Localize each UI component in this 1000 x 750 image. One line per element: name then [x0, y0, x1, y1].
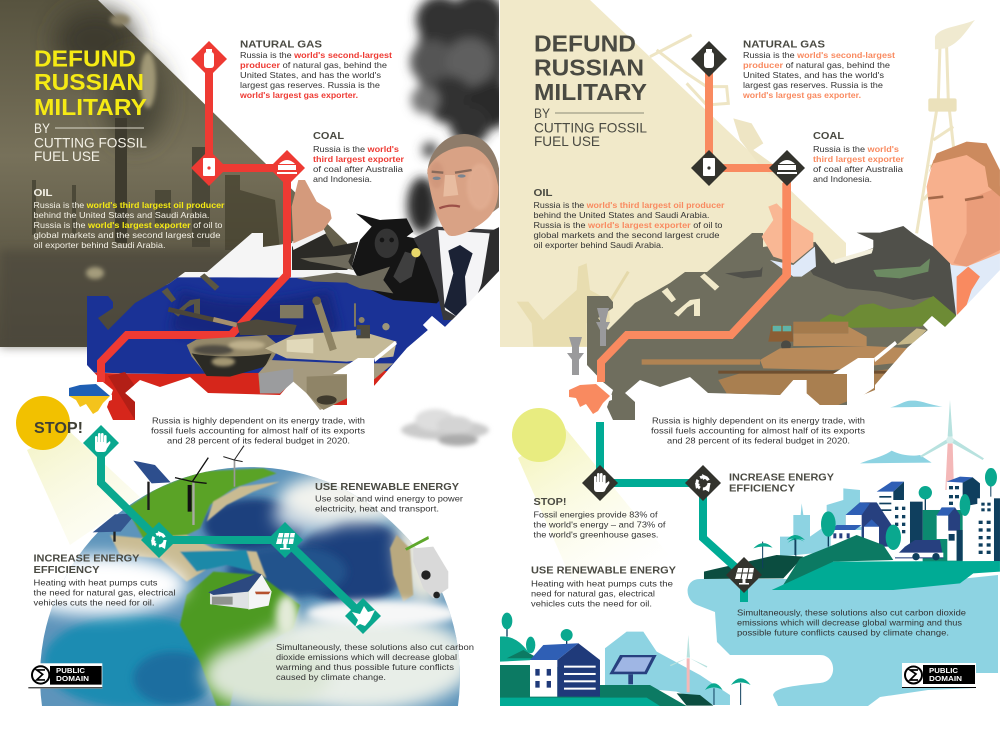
text: coal [813, 130, 905, 184]
Russian flag map [87, 233, 452, 420]
text: simultaneously [737, 608, 966, 638]
text: increase energy efficiency: INCREASE ENERGY [34, 553, 140, 565]
icon: gas cylinder node [691, 41, 727, 77]
text: oil: OIL [34, 187, 53, 199]
palm trees [714, 683, 741, 705]
text: coal [313, 130, 405, 184]
text: coal: third largest exporter [813, 154, 905, 164]
icon: stop hand node [83, 425, 119, 457]
text: energy trade: Russia is highly dependent on its energy trade, with [152, 416, 365, 426]
text: natural gas: producer of natural gas, behind the [240, 60, 387, 70]
text: oil: oil exporter behind Saudi Arabia. [534, 240, 664, 250]
text: oil: Russia is the world's third largest oil producer [34, 200, 225, 210]
text: coal: of coal after Australia [813, 164, 903, 174]
panel: left photographic version [0, 0, 514, 712]
text: oil: global markets and the second largest crude [34, 230, 221, 240]
teal solution pathway [97, 457, 357, 610]
text: use renewable energy: electricity, heat and transport. [315, 504, 439, 514]
text: natural gas: United States, and has the world's [240, 70, 381, 80]
battle tanks [168, 296, 397, 410]
panel: right illustrated version [500, 0, 1000, 706]
text: stop: Fossil energies provide 83% of [534, 510, 658, 520]
icon: gas cylinder node [191, 41, 227, 73]
public domain label: PUBLIC [56, 668, 85, 675]
Putin, pointing arm and skeleton figure [292, 134, 500, 320]
factory smoke and chimneys [0, 8, 280, 347]
text: increase energy efficiency: vehicles cuts the need for oil. [34, 598, 154, 608]
text: increase energy efficiency: INCREASE ENERGY [729, 471, 834, 483]
text: use renewable energy: Heating with heat pumps cuts the [531, 579, 673, 589]
text: simultaneously: Simultaneously, these solutions also cut carbon dioxide [737, 608, 966, 618]
wind turbine [945, 443, 954, 490]
sun and beam [512, 408, 677, 592]
text: coal: Russia is the world's [313, 144, 399, 154]
solar panels [133, 461, 171, 483]
electric car [405, 536, 429, 551]
title: RUSSIAN [34, 69, 144, 95]
text: coal: COAL [313, 130, 345, 142]
title: DEFUND [534, 31, 636, 57]
text: simultaneously: Simultaneously, these solutions also cut carbon [276, 642, 474, 652]
text: natural gas: NATURAL GAS [743, 38, 825, 50]
icon: recycle node [685, 465, 721, 501]
icon: coal cart node [273, 150, 305, 182]
palm [794, 540, 797, 558]
text: use renewable energy: vehicles cuts the need for oil. [531, 599, 652, 609]
icon: stop hand node [582, 465, 618, 501]
icon: solar panel node [267, 522, 303, 558]
trees [828, 523, 829, 547]
missiles [567, 308, 610, 375]
text: natural gas: largest gas reserves. Russia is the [240, 80, 380, 90]
houses [846, 502, 892, 547]
white cut-outs of the right map [833, 270, 1000, 430]
background buildings [780, 488, 880, 557]
public domain badge: PUBLIC [929, 668, 958, 675]
text: natural gas: producer of natural gas, behind the [743, 60, 890, 70]
tie [444, 245, 473, 317]
cream background [500, 0, 846, 347]
text: increase energy efficiency [729, 471, 834, 495]
small turbine [687, 658, 690, 692]
white cut-outs of the map [333, 271, 499, 405]
text: natural gas: NATURAL GAS [240, 38, 322, 50]
text: coal: COAL [813, 130, 845, 142]
text: coal: and Indonesia. [813, 174, 872, 184]
trees [506, 622, 508, 637]
smoke cloud [407, 0, 514, 233]
hills [500, 665, 687, 706]
text: increase energy efficiency: EFFICIENCY [729, 483, 795, 495]
title: FUEL USE [34, 148, 100, 164]
text: stop: STOP! [534, 496, 566, 508]
title: CUTTING FOSSIL [534, 120, 647, 136]
text: coal: and Indonesia. [313, 174, 372, 184]
text: oil: Russia is the world's third largest oil producer [534, 200, 725, 210]
text: natural gas [742, 38, 895, 100]
icon: oil barrel node [191, 154, 223, 186]
buildings [923, 510, 963, 567]
text: oil [34, 187, 225, 250]
text: natural gas: world's largest gas exporter. [742, 90, 861, 100]
cream inlets [662, 273, 719, 317]
title: BY [34, 120, 51, 136]
text: energy trade: fossil fuels accounting for almost half of its exports [651, 426, 865, 436]
text: coal: Russia is the world's [813, 144, 899, 154]
text: oil: behind the United States and Saudi Arabia. [34, 210, 210, 220]
wind turbines [192, 482, 195, 525]
title [534, 31, 647, 149]
jet fighters [297, 254, 393, 293]
title: MILITARY [534, 79, 647, 105]
text: simultaneously [275, 642, 474, 682]
title: MILITARY [34, 94, 147, 120]
north america [110, 468, 413, 706]
text: energy trade: and 28 percent of its federal budget in 2020. [667, 436, 850, 446]
text: stop: the world's greenhouse gases. [534, 530, 658, 540]
clouds [7, 555, 187, 615]
text: natural gas [239, 38, 392, 100]
orange pipeline [601, 59, 787, 382]
Russia map silhouette [580, 225, 970, 425]
public domain badge [902, 663, 976, 688]
text: coal: third largest exporter [313, 154, 405, 164]
text: increase energy efficiency: EFFICIENCY [34, 564, 100, 576]
text: simultaneously: emissions which will decrease global warming and thus [737, 618, 962, 628]
text: oil [534, 187, 725, 250]
text: oil: global markets and the second largest crude [534, 230, 720, 240]
solar panel [609, 655, 657, 674]
icon: recycle node [141, 522, 173, 558]
icon: solar panel node [726, 557, 762, 593]
icon: dove node [345, 598, 381, 634]
refinery and oil rig decoration [517, 20, 975, 347]
text: increase energy efficiency: the need for natural gas, electrical [34, 588, 176, 598]
text: natural gas: Russia is the world's second-largest [743, 50, 895, 60]
red pipeline [101, 59, 287, 382]
head: hair [427, 134, 500, 217]
earth globe [7, 446, 473, 712]
inlets of the map [162, 273, 219, 317]
icon: coal cart node [769, 150, 805, 186]
lake [600, 575, 998, 706]
Ukraine flag map [69, 384, 112, 414]
brown tank and rocket truck [642, 322, 927, 405]
public domain badge [28, 663, 102, 689]
text: oil: Russia is the world's largest exporter of oil to [534, 220, 723, 230]
grey cloud [401, 409, 489, 446]
text: use renewable energy: USE RENEWABLE ENERGY [315, 481, 459, 493]
text: simultaneously: warming and thus possible future conflicts [275, 662, 454, 672]
text: oil: oil exporter behind Saudi Arabia. [34, 240, 166, 250]
text: oil: OIL [534, 187, 553, 199]
text: oil: Russia is the world's largest exporter of oil to [34, 220, 223, 230]
Ukraine map [567, 383, 612, 416]
head: face [427, 146, 498, 236]
skeleton figure [352, 213, 443, 303]
light blue buildings [605, 632, 730, 705]
house [210, 592, 248, 609]
title: DEFUND [34, 46, 136, 72]
shirt [438, 230, 490, 317]
text: use renewable energy: Use solar and wind energy to power [315, 494, 463, 504]
icon: oil barrel node [691, 150, 727, 186]
sun with STOP [16, 396, 140, 545]
public domain badge: DOMAIN [929, 676, 962, 683]
text: use renewable energy [531, 565, 676, 609]
village with house, solar panel and turbine [500, 613, 751, 706]
green shoreline [704, 535, 1000, 590]
text: simultaneously: possible future conflicts caused by climate change. [737, 628, 949, 638]
text: oil: behind the United States and Saudi Arabia. [534, 210, 710, 220]
text: natural gas: United States, and has the world's [743, 70, 884, 80]
text: stop: the world's energy – and 73% of [534, 520, 666, 530]
public domain label line two: DOMAIN [56, 676, 89, 683]
dark jacket arm [292, 230, 358, 270]
title: CUTTING FOSSIL [34, 135, 147, 151]
olive factory background [0, 0, 347, 347]
text: energy trade: fossil fuels accounting for almost half of its exports [151, 426, 365, 436]
house [530, 660, 557, 697]
hillside, helicopter and bushes [725, 226, 957, 328]
text: energy trade: Russia is highly dependent on its energy trade, with [652, 416, 865, 426]
suit [413, 227, 500, 320]
text: energy trade [151, 416, 365, 446]
title: BY [534, 105, 551, 121]
title: FUEL USE [534, 133, 600, 149]
text: natural gas: largest gas reserves. Russia is the [743, 80, 883, 90]
text: energy trade: and 28 percent of its federal budget in 2020. [167, 436, 350, 446]
text: use renewable energy: USE RENEWABLE ENERGY [531, 565, 676, 577]
text: increase energy efficiency [34, 553, 176, 608]
text: energy trade [651, 416, 865, 446]
illustrated Putin [927, 142, 1000, 320]
title [34, 46, 147, 164]
text: coal: of coal after Australia [313, 164, 403, 174]
electric car and charger [895, 540, 943, 558]
text: simultaneously: caused by climate change. [276, 672, 386, 682]
stop label: STOP! [34, 420, 83, 437]
title: RUSSIAN [534, 54, 644, 80]
south america [180, 572, 300, 706]
text: natural gas: Russia is the world's second-largest [240, 50, 392, 60]
text: stop [534, 496, 666, 540]
text: use renewable energy [315, 481, 463, 514]
clouds [860, 401, 943, 463]
text: use renewable energy: need for natural gas, electrical [531, 589, 655, 599]
teal solution pathway [600, 422, 744, 602]
pointing hand [292, 180, 332, 243]
illustrated pointing hand [762, 183, 816, 277]
text: natural gas: world's largest gas exporter. [239, 90, 358, 100]
city and wind turbine [780, 400, 1000, 567]
text: increase energy efficiency: Heating with heat pumps cuts [34, 578, 158, 588]
text: simultaneously: dioxide emissions which will decrease global [276, 652, 457, 662]
